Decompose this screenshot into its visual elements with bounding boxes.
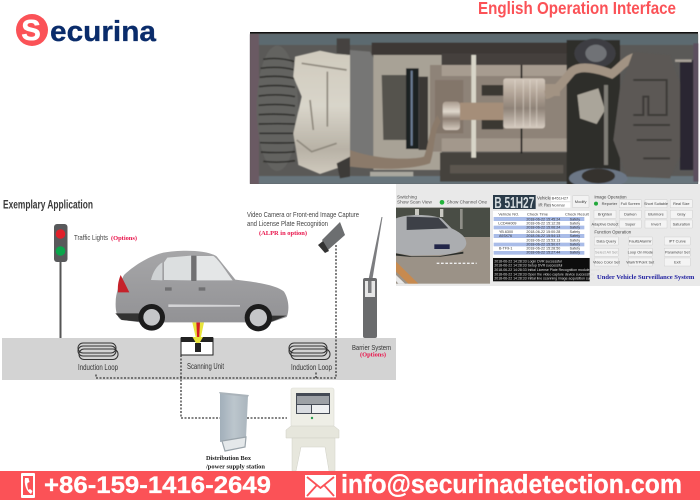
- diagram: traffic light: [54, 224, 68, 338]
- logo wordmark: ecurina: [50, 16, 157, 48]
- records table: [493, 211, 590, 258]
- label: Barrier System: [352, 343, 391, 358]
- records table: A93X76: [499, 234, 512, 238]
- log console: 2018-06-22 14:28:33 Setup DVR successful: [494, 264, 563, 268]
- label: Barrier System: Barrier System: [352, 343, 391, 352]
- image operation panel: Data Query: [597, 239, 616, 243]
- image operation panel: Brighten: [598, 213, 612, 217]
- rear suspension: [567, 40, 620, 187]
- logo: Securina: [16, 14, 157, 48]
- label: distribution box: [205, 455, 265, 470]
- label: Barrier System: (Options): [360, 352, 386, 358]
- records table: 2018-06-22 15:45:24: [526, 217, 560, 221]
- road band: [2, 338, 396, 380]
- muffler: [503, 78, 545, 128]
- diagram: distribution box: [219, 392, 249, 451]
- label: distribution box: Distribution Box: [206, 455, 252, 462]
- sensor beam: [192, 322, 204, 342]
- panel: operation software screenshot: B 51H27: [494, 195, 534, 212]
- image operation panel: Full Screen: [621, 202, 640, 206]
- centre pipes: [460, 103, 505, 120]
- diagram: car: [115, 251, 288, 342]
- label: video camera: Video Camera or Front-end Image Capture: [247, 210, 359, 219]
- label: Induction Loop left: Induction Loop: [78, 363, 118, 372]
- image operation panel: Function Operation: [594, 230, 632, 235]
- image operation panel: Exit: [674, 260, 681, 264]
- logo icon: red circle S: [16, 14, 48, 47]
- rear wheel: [138, 304, 165, 331]
- image operation panel: Real Size: [673, 202, 690, 206]
- records table: 2018-06-22 15:28:50: [526, 247, 560, 251]
- car body: [116, 251, 288, 322]
- rear door glass: [164, 256, 191, 280]
- records table: LCD4H009: [498, 221, 516, 225]
- records table: 2018-06-22 15:12:28: [526, 221, 560, 225]
- records table: 2018-06-22 15:06:24: [526, 226, 560, 230]
- records table: Safety: [570, 230, 580, 234]
- white background for application diagram: [0, 184, 396, 471]
- image operation panel: Adaptive Detect: [591, 222, 619, 226]
- tail pipe: [545, 57, 637, 95]
- log console: 2018-06-22 14:28:33 Initial line scanning image acquisition succe: [494, 277, 595, 281]
- tan floor panel: [373, 53, 442, 170]
- front plate: [350, 50, 383, 167]
- vehicle number fields: Vehicle NO.: [537, 196, 560, 201]
- diagram: scanning unit: [181, 337, 213, 355]
- image operation panel: Saturation: [673, 222, 690, 226]
- front tyre and shield, left portion: [257, 38, 352, 178]
- records table: 2018-06-22 15:54:13: [526, 234, 560, 238]
- image operation panel: Video Color Set: [593, 260, 621, 264]
- records table: Vehicle NO.: [498, 212, 519, 217]
- image operation panel: Short Suitable: [644, 202, 668, 206]
- contact bar: [0, 471, 700, 500]
- records table: Safety: [570, 251, 580, 255]
- rear shield: [613, 52, 680, 178]
- label: Induction Loop right: Induction Loop: [291, 363, 332, 372]
- log console: 2018-06-22 14:28:33 Initial License Plate Recognition module succe: [494, 268, 600, 272]
- label: video camera: [247, 210, 359, 237]
- tail light: [118, 275, 129, 292]
- label: Traffic Lights: Traffic Lights: [74, 233, 108, 242]
- records table: Safety: [570, 234, 580, 238]
- label: Traffic Lights: (Options): [111, 235, 137, 242]
- diagram: induction loop left: [78, 343, 118, 360]
- records table: 2018-06-22 15:27:44: [526, 251, 560, 255]
- log console: [493, 258, 600, 281]
- image operation panel: Gray: [677, 213, 686, 217]
- label: Scanning Unit: Scanning Unit: [187, 362, 225, 371]
- label: video camera: (ALPR in option): [259, 230, 307, 237]
- image operation panel: Image Operation: [594, 194, 627, 199]
- records table: YB.6300: [499, 230, 513, 234]
- underbody, right portion: [350, 39, 698, 188]
- image operation panel: WarkTrPoint Set: [626, 260, 655, 264]
- panel: operation software screenshot: [396, 184, 700, 286]
- central tunnel: [430, 65, 570, 152]
- diagram heading: Exemplary Application: Exemplary Application: [3, 198, 93, 212]
- cross bar: [406, 68, 419, 149]
- image operation panel: FaultsAlarmir: [629, 239, 652, 243]
- icon: phone: [21, 473, 35, 498]
- image operation panel: Select All Set: [595, 251, 619, 255]
- image operation panel: [591, 194, 692, 266]
- panel: operation software screenshot: B451H27: [552, 196, 569, 201]
- records table: 2018-06-22 15:50:07: [526, 242, 560, 246]
- catalytic converter: [435, 80, 463, 133]
- log console: 2018-06-22 14:28:33 Login DVR successful: [494, 259, 562, 263]
- brace: [471, 55, 476, 158]
- records table: Safety: [570, 247, 580, 251]
- rear edge: [680, 60, 693, 170]
- photo: vehicle undercarriage scan: [250, 32, 698, 188]
- rear glass: [151, 262, 162, 280]
- live video label row: Switching: [397, 194, 417, 199]
- diagram: camera: [318, 222, 345, 253]
- logo icon: red circle S: S: [21, 15, 41, 47]
- image operation panel: Blurmore: [648, 213, 664, 217]
- records table: Safety: [570, 242, 580, 246]
- icon: envelope: [305, 475, 336, 498]
- panel: operation software screenshot: Show Scan View: [397, 200, 432, 205]
- image operation panel: Super: [625, 222, 636, 226]
- front wheel: [245, 304, 272, 331]
- front door glass: [197, 256, 233, 280]
- records table: 2018-06-22 15:00:28: [526, 230, 560, 234]
- image operation panel: IPT Curve: [669, 239, 686, 243]
- records table: 2018-06-22 15:53:13: [526, 238, 560, 242]
- image operation panel: Invert: [651, 222, 662, 226]
- records table: B-TF9-1: [499, 247, 512, 251]
- label: video camera: and License Plate Recognition: [247, 219, 328, 228]
- dark top and bottom bands: [372, 43, 572, 55]
- records table: Check Time: [527, 212, 549, 217]
- wiring: dashed connections: [96, 245, 336, 418]
- front camera view: [396, 208, 490, 284]
- image operation panel: Loop On Mode: [628, 251, 653, 255]
- image operation panel: Darken: [624, 213, 637, 217]
- image operation panel: Reporter: [602, 201, 618, 206]
- label: distribution box: /power supply station: [205, 464, 265, 470]
- log console: 2018-06-22 14:28:33 Open the video capture device successfully: [494, 272, 595, 276]
- diagram: operator console: [286, 388, 339, 471]
- panel: operation software screenshot: Modify: [575, 199, 587, 204]
- panel: operation software screenshot: Show Channel One: [447, 200, 487, 205]
- records table: Check Result: [565, 212, 590, 217]
- image operation panel: Parameter Set: [665, 251, 691, 255]
- system title: Under Vehicle Surveillance System: [597, 274, 695, 281]
- records table: Safety: [570, 217, 580, 221]
- panel: operation software screenshot: IR Result: [538, 202, 557, 207]
- records table: Safety: [570, 238, 580, 242]
- panel: operation software screenshot: Normal: [552, 202, 565, 207]
- plate number display: [493, 195, 536, 209]
- records table: Safety: [570, 221, 580, 225]
- records table: Safety: [570, 226, 580, 230]
- diagram: induction loop right: [289, 343, 330, 360]
- diagram: barrier system: [363, 217, 382, 338]
- label: Traffic Lights: [74, 233, 137, 242]
- text: email address: info@securinadetection.com: [341, 471, 682, 499]
- text: phone number: +86-159-1416-2649: [44, 472, 271, 499]
